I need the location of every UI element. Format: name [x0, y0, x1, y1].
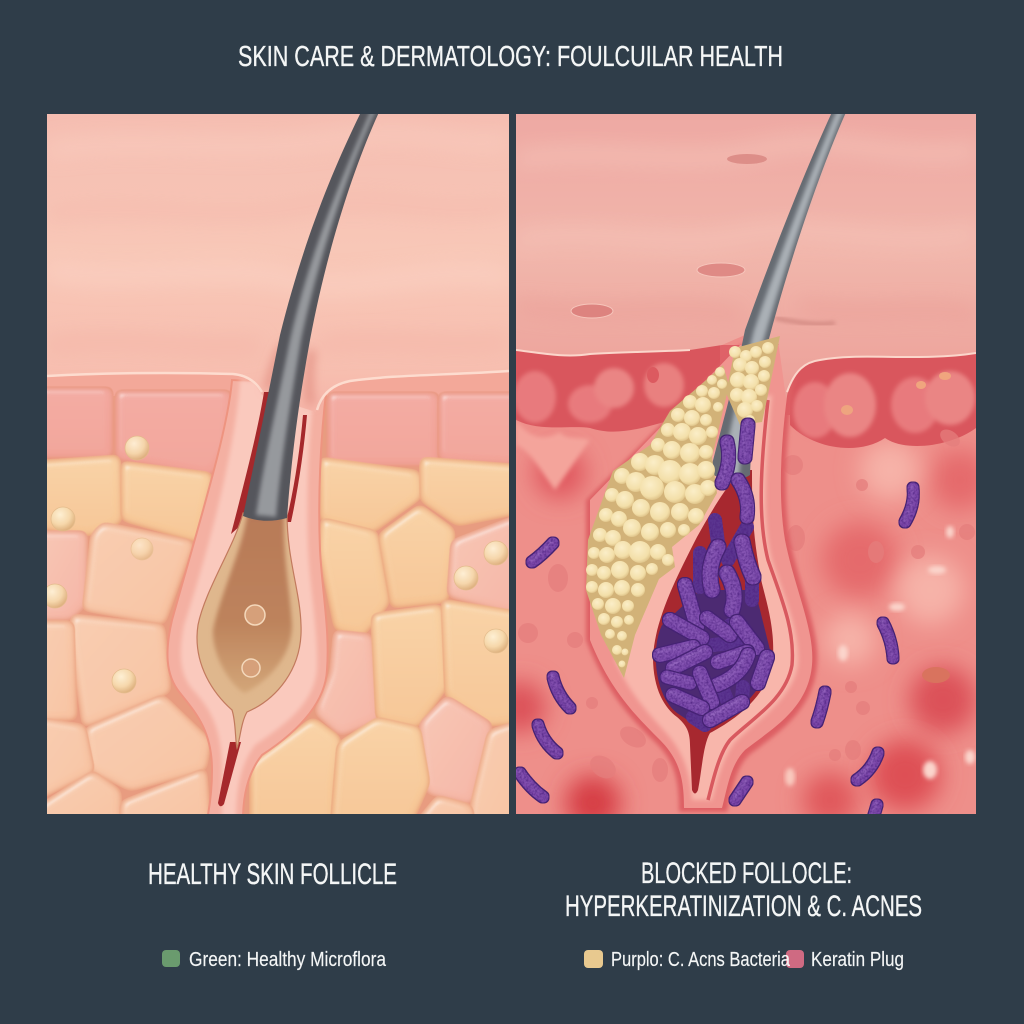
skin cells in dermis [518, 426, 975, 783]
blocked follicle sheath [586, 345, 817, 812]
deep bacteria mass [656, 590, 770, 725]
hair shaft [243, 110, 380, 521]
legend: healthy microflora: Green: Healthy Microflora [189, 949, 387, 971]
C. acnes bacteria cluster [660, 425, 767, 725]
upper skin layer [47, 114, 509, 412]
hair bulb with sebum [197, 513, 301, 748]
skin cell layers [36, 386, 522, 828]
legend: C. acnes bacteria: Purplo: C. Acns Bacteria [611, 949, 791, 971]
panel: healthy skin follicle illustration [36, 110, 522, 828]
heading: healthy skin follicle: HEALTHY SKIN FOLLICLE [148, 858, 397, 891]
free-floating C. acnes bacteria [520, 488, 913, 822]
hair shaft [710, 110, 847, 480]
legend: keratin plug: Keratin Plug [811, 949, 904, 971]
follicle sheath [167, 380, 328, 820]
inflamed tissue blotches [494, 440, 990, 831]
heading: blocked follicle: BLOCKED FOLLOCLE: [641, 857, 852, 890]
keratin plug [586, 336, 780, 678]
microflora bubbles [43, 436, 508, 693]
inflamed epidermal papillae [514, 345, 976, 490]
upper skin layer [516, 114, 976, 398]
heading: blocked follicle [565, 857, 922, 923]
panel: blocked follicle illustration [494, 110, 990, 831]
title: SKIN CARE & DERMATOLOGY: FOULCUILAR HEALTH [238, 41, 783, 73]
dark sheath gap around hair [218, 392, 307, 806]
follicle lumen [653, 470, 773, 794]
